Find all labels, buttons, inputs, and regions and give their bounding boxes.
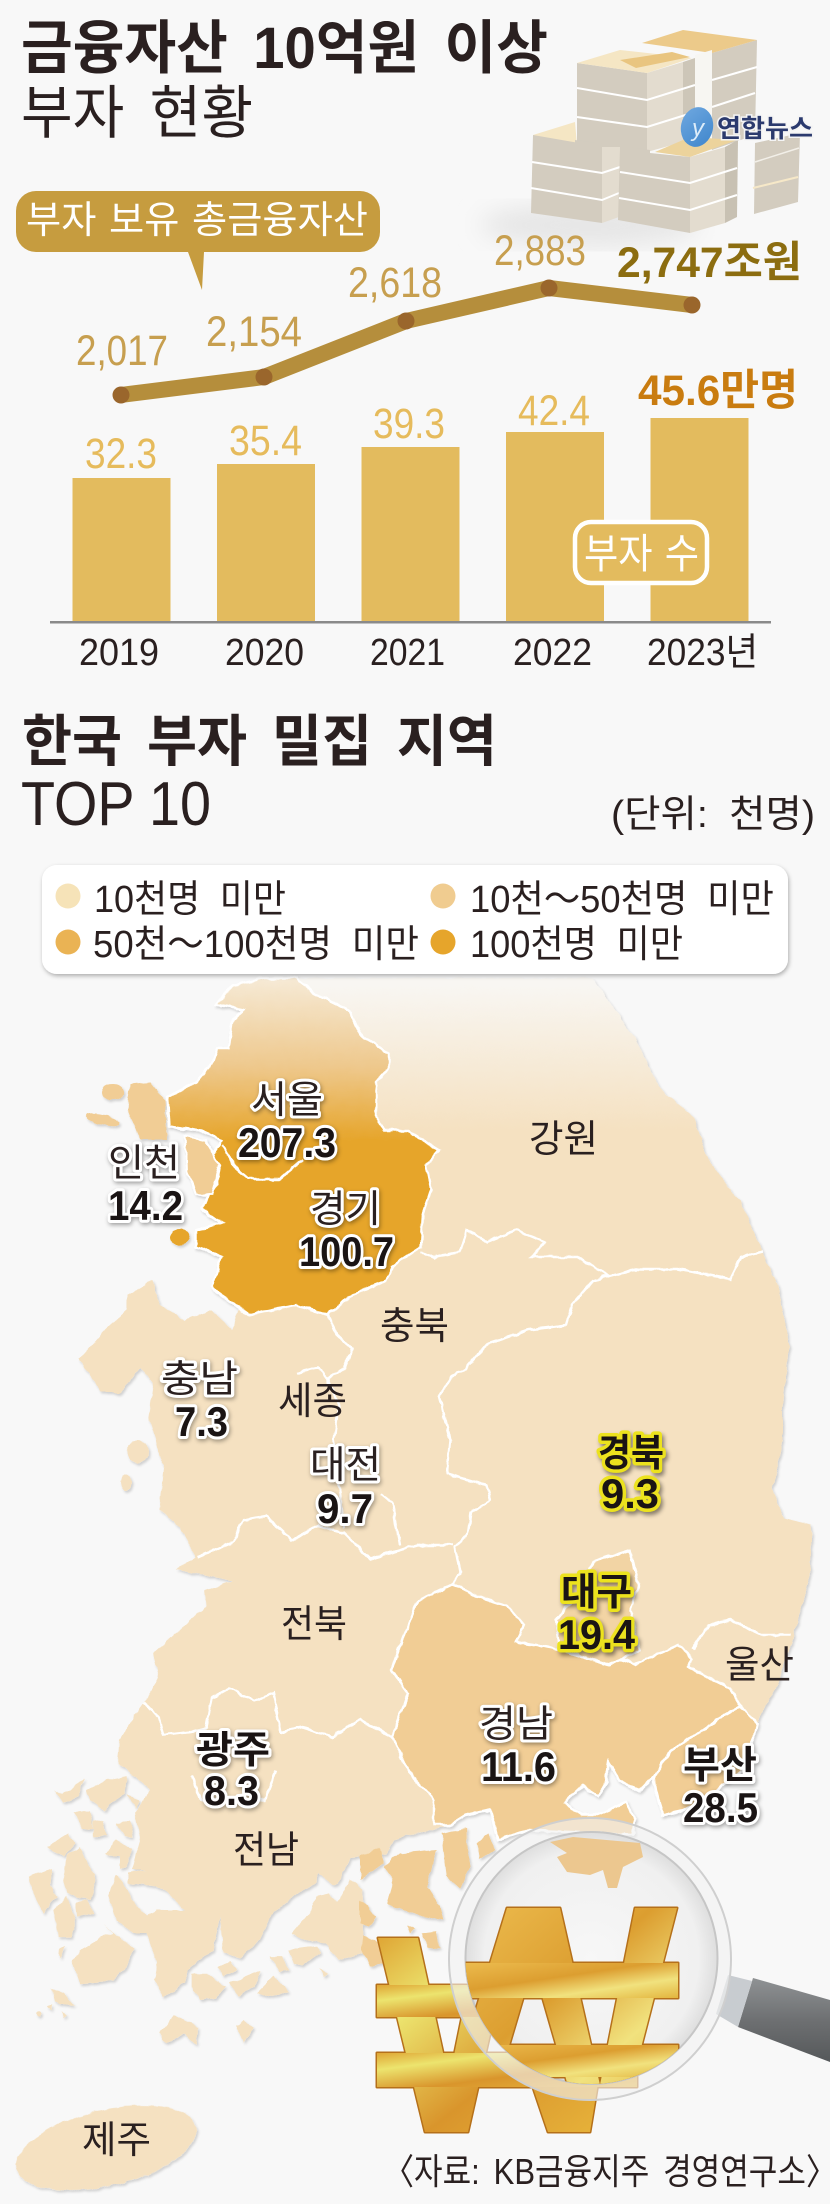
- label: 광주 8.3: 광주: [196, 1730, 270, 1772]
- tag: 부자 수: 부자 수: [584, 531, 699, 577]
- label: 경기 100.7: [299, 1189, 394, 1275]
- icon: stacks of money: [480, 30, 800, 247]
- label: 경기 100.7: 경기: [310, 1189, 381, 1231]
- west coast islands: [121, 1441, 150, 1490]
- data point 2019: [112, 386, 130, 404]
- label: 제주: 제주: [82, 2120, 151, 2162]
- bar value 42.4: 42.4: [518, 387, 590, 435]
- label: 부산 28.5: 28.5: [683, 1784, 758, 1831]
- region: 부산: [654, 1706, 757, 1815]
- label: 충북: 충북: [380, 1306, 449, 1348]
- legend swatch: 50천～100천명 미만: 50천～100천명 미만: [93, 924, 419, 966]
- region: 대구: [556, 1550, 640, 1665]
- label: 경남 11.6: 11.6: [481, 1743, 556, 1790]
- label: 대구 19.4: 대구: [561, 1572, 632, 1614]
- southwest islands: [28, 1777, 363, 2045]
- title: 금융자산 10억원 이상 부자 현황: 부자 현황: [21, 81, 253, 146]
- bar value 45.6만명: 45.6만명: [638, 367, 798, 415]
- back block: [712, 40, 757, 150]
- region borders: [143, 1145, 791, 1800]
- label: 서울 207.3: [238, 1080, 336, 1166]
- label: 대전 9.7: 대전: [310, 1445, 381, 1487]
- label: 경북 9.3: 경북: [598, 1433, 664, 1475]
- lower left block: [533, 122, 577, 145]
- label: 부산 28.5: [683, 1745, 758, 1831]
- data point 2023: [684, 296, 700, 314]
- icon: gold won symbol under magnifier: [377, 1818, 830, 2132]
- year 2019: 2019: [79, 632, 159, 674]
- label: 충남 7.3: 7.3: [175, 1398, 228, 1445]
- islands of 경기: [170, 1229, 190, 1245]
- line value 2,618: 2,618: [348, 259, 442, 307]
- region: 경기·서울: [167, 978, 439, 1315]
- bar value 39.3: 39.3: [373, 400, 445, 448]
- year 2023년: 2023년: [647, 632, 758, 674]
- bar value 35.4: 35.4: [229, 417, 302, 465]
- data point 2022: [540, 280, 558, 296]
- data point 2020: [256, 368, 272, 386]
- far right block: [754, 133, 800, 214]
- label: 서울 207.3: 207.3: [238, 1119, 336, 1166]
- year 2020: 2020: [225, 632, 304, 674]
- legend swatch: 100천명 미만: 100천명 미만: [470, 924, 683, 966]
- legend: [42, 865, 788, 974]
- label: 대전 9.7: 9.7: [317, 1485, 373, 1532]
- bar 2021: [362, 447, 460, 621]
- magnified contents: [466, 1837, 680, 2084]
- label: 부산 28.5: 부산: [683, 1745, 757, 1787]
- line chart: total financial assets: [76, 227, 802, 404]
- label: 인천 14.2: [108, 1143, 183, 1229]
- line value 2,017: 2,017: [76, 327, 168, 375]
- axis: [50, 621, 771, 624]
- line value 2,747조원: 2,747조원: [617, 239, 802, 287]
- logo: 연합뉴스: [677, 104, 813, 150]
- heading: 한국 부자 밀집 지역 TOP 10: 한국 부자 밀집 지역: [22, 710, 497, 773]
- bar value 32.3: 32.3: [85, 430, 157, 478]
- label: 강원: 강원: [529, 1119, 598, 1161]
- label: 전북: 전북: [281, 1604, 347, 1646]
- title: 금융자산 10억원 이상 부자 현황: [21, 16, 548, 146]
- label: 인천 14.2: 인천: [108, 1143, 180, 1185]
- bar 2022: [506, 432, 604, 621]
- magnifier lens: [449, 1818, 731, 2100]
- legend swatch: 10천명 미만: 10천명 미만: [94, 879, 286, 921]
- region: 경남: [392, 1584, 741, 1840]
- label: 세종: 세종: [278, 1381, 347, 1423]
- unit note: (단위: 천명): [611, 794, 815, 836]
- label: 인천 14.2: 14.2: [108, 1182, 183, 1229]
- bar 2019: [72, 478, 170, 621]
- label: 대구 19.4: 19.4: [558, 1611, 636, 1658]
- front block: [618, 150, 690, 233]
- small won symbol: [377, 1938, 637, 2132]
- year 2022: 2022: [513, 632, 592, 674]
- title: 금융자산 10억원 이상 부자 현황: 금융자산 10억원 이상: [21, 16, 548, 81]
- bar 2020: [217, 464, 315, 621]
- upper block: [577, 63, 647, 152]
- label: 경기 100.7: 100.7: [299, 1228, 394, 1275]
- line value 2,154: 2,154: [206, 308, 302, 356]
- line value 2,883: 2,883: [494, 227, 586, 275]
- data point 2021: [398, 312, 414, 330]
- bar 2023: [650, 418, 748, 621]
- label: 대전 9.7: [310, 1445, 381, 1532]
- label: 울산: 울산: [725, 1645, 794, 1687]
- label: 충남 7.3: 충남: [161, 1359, 238, 1401]
- bar chart: number of rich people: [50, 367, 798, 674]
- label: 광주 8.3: [196, 1730, 270, 1814]
- label: 경북 9.3: 9.3: [601, 1470, 659, 1517]
- label: 광주 8.3: 8.3: [204, 1767, 259, 1814]
- map of South Korea: [8, 978, 812, 2204]
- logo: 연합뉴스: y: [690, 115, 706, 142]
- label: 전남: 전남: [233, 1830, 299, 1872]
- southern islands of 경남: [360, 1828, 497, 1967]
- label: 경남 11.6: [479, 1704, 556, 1790]
- legend swatch: 10천～50천명 미만: 10천～50천명 미만: [470, 879, 774, 921]
- region: 인천: [84, 1082, 220, 1195]
- heading: 한국 부자 밀집 지역 TOP 10: [21, 710, 497, 839]
- mainland: [79, 978, 812, 1998]
- label: 경남 11.6: 경남: [479, 1704, 553, 1746]
- callout: 부자 보유 총금융자산: 부자 보유 총금융자산: [26, 200, 368, 242]
- callout: 부자 보유 총금융자산: [16, 191, 380, 290]
- logo: 연합뉴스: 연합뉴스: [717, 115, 813, 143]
- label: 충남 7.3: [161, 1359, 238, 1445]
- year 2021: 2021: [370, 632, 445, 674]
- label: 서울 207.3: 서울: [251, 1080, 323, 1122]
- label: 경북 9.3: [598, 1433, 664, 1517]
- region: 제주: [8, 2090, 204, 2204]
- label: 대구 19.4: [558, 1572, 636, 1658]
- tag: 부자 수: [575, 522, 707, 583]
- magnifier handle: [716, 1975, 830, 2062]
- heading: 한국 부자 밀집 지역 TOP 10: TOP 10: [21, 770, 211, 839]
